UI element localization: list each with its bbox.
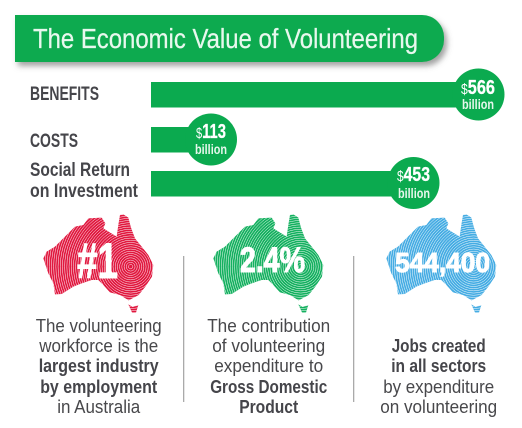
text: jobs created: in all sectors (391, 355, 486, 376)
icon: red Australia map (43, 214, 154, 313)
text: GDP contribution: Product (239, 396, 298, 417)
bar: social return on investment: billion (398, 186, 430, 201)
icon: red Australia map: #1 (77, 233, 118, 289)
icon: blue Australia map: 544,400 (395, 247, 490, 278)
text: largest industry: The volunteering (36, 315, 162, 336)
panel: largest industry (36, 214, 161, 413)
bar: costs: $113 (196, 121, 226, 143)
bar: social return on investment: Social Return (30, 160, 130, 181)
bar: benefits: BENEFITS (30, 84, 99, 105)
bar: benefits (30, 68, 504, 120)
text: jobs created: by expenditure (383, 376, 494, 397)
text: largest industry (36, 315, 162, 417)
bar: costs: COSTS (30, 131, 78, 152)
bar: social return on investment: $453 (397, 164, 430, 186)
bar: benefits: billion (462, 97, 494, 112)
title banner (15, 15, 444, 62)
text: GDP contribution: Gross Domestic (210, 376, 327, 397)
text: jobs created: on volunteering (380, 396, 497, 417)
text: largest industry: in Australia (57, 396, 141, 417)
text: GDP contribution (207, 315, 330, 417)
bar: costs (30, 114, 237, 166)
bar: social return on investment: on Investment (30, 181, 139, 202)
icon: green Australia map (213, 214, 324, 313)
icon: green Australia map: 2.4% (240, 241, 305, 280)
bar: social return on investment (30, 157, 440, 209)
text: largest industry: workforce is the (38, 335, 158, 356)
bar: benefits: $566 (461, 77, 495, 99)
icon: blue Australia map (386, 214, 496, 313)
text: GDP contribution: The contribution (207, 315, 330, 336)
panel: GDP contribution (208, 214, 330, 413)
panel: jobs created (381, 214, 496, 417)
text: largest industry: by employment (40, 376, 157, 397)
title banner: The Economic Value of Volunteering (33, 23, 418, 54)
bar: costs: billion (195, 142, 227, 157)
text: GDP contribution: expenditure to (214, 355, 323, 376)
text: largest industry: largest industry (39, 355, 159, 376)
text: GDP contribution: of volunteering (212, 335, 325, 356)
text: jobs created (380, 335, 497, 417)
text: jobs created: Jobs created (392, 335, 486, 356)
